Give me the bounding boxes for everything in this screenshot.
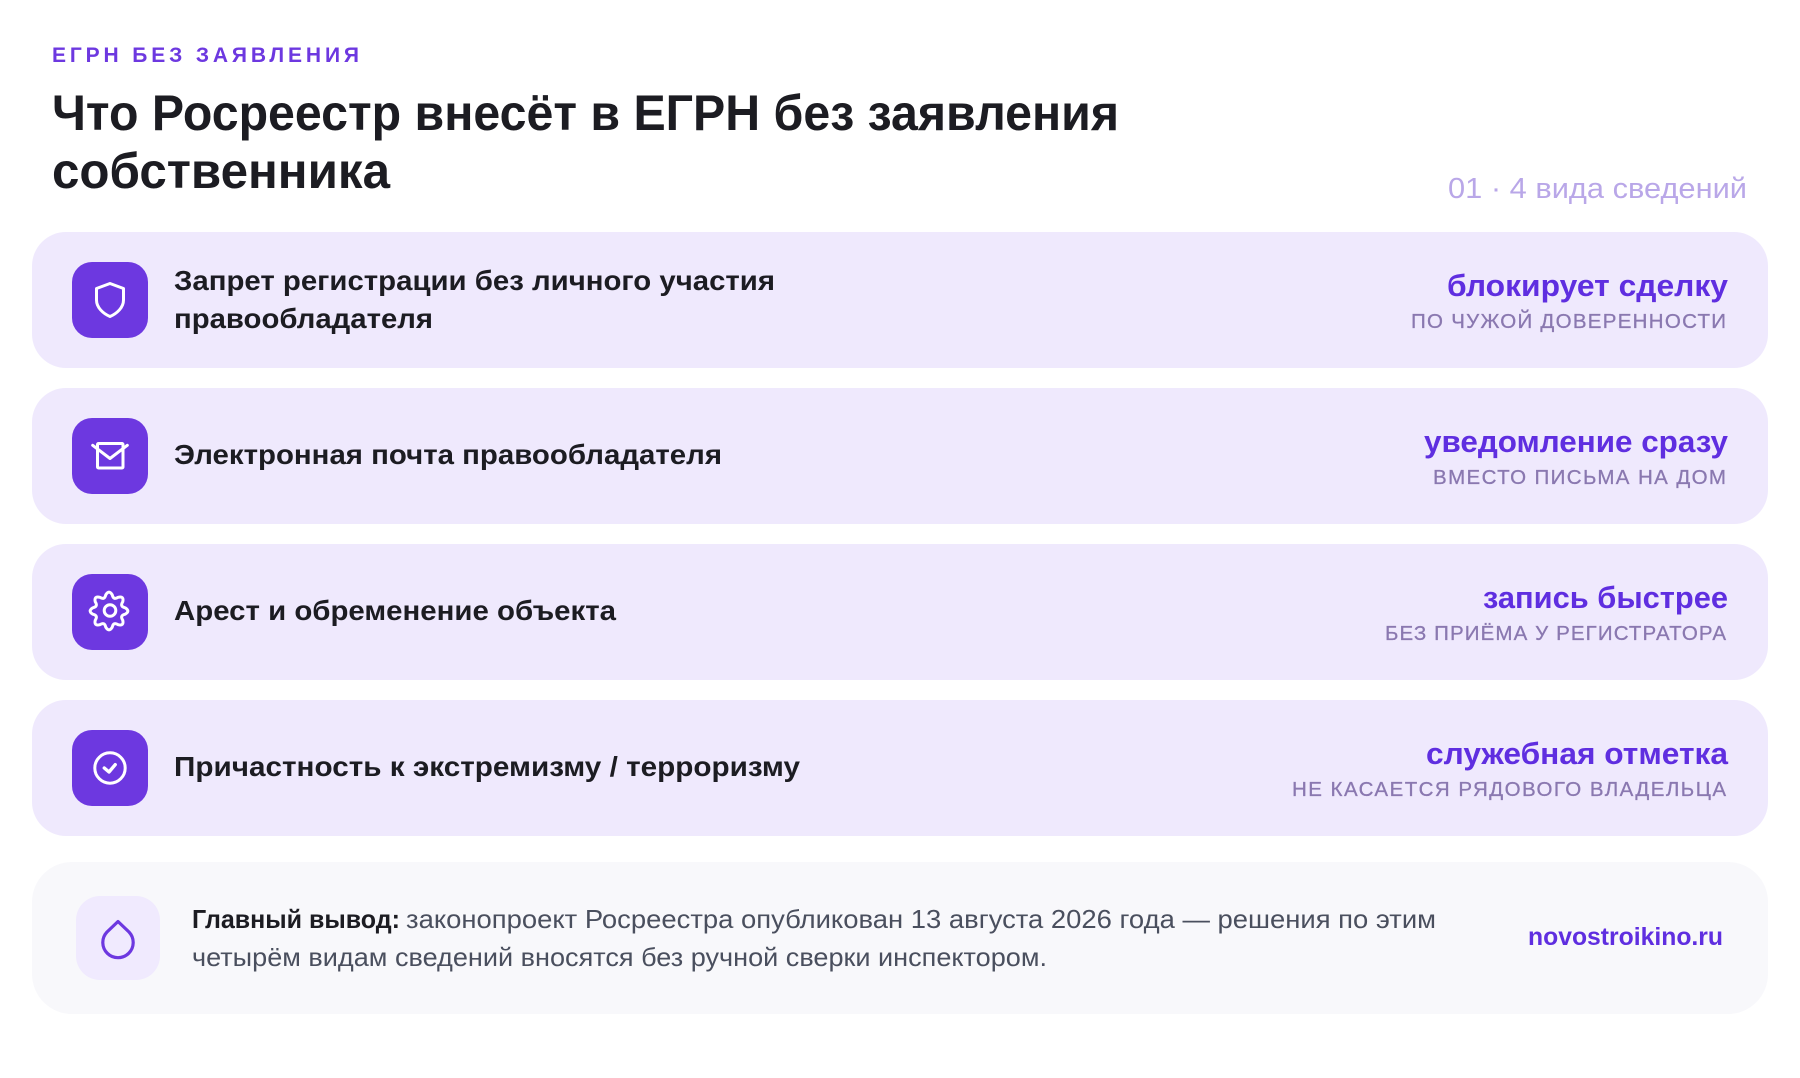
panel: row 4 <box>32 700 1768 836</box>
panel: row 1 <box>32 232 1768 368</box>
row 1 note: ПО ЧУЖОЙ ДОВЕРЕННОСТИ <box>1411 309 1726 333</box>
icon: check circle <box>72 730 148 806</box>
section tag: 01 · 4 вида сведений <box>1448 173 1747 205</box>
panel: row 2 <box>32 388 1768 524</box>
row 1 label <box>174 265 775 334</box>
row 1 label: правообладателя <box>174 303 433 334</box>
icon: drop <box>76 896 160 980</box>
conclusion text <box>192 904 1436 972</box>
row 3 note: БЕЗ ПРИЁМА У РЕГИСТРАТОРА <box>1385 622 1726 645</box>
icon: mail <box>72 418 148 494</box>
conclusion text: Главный вывод: <box>192 904 400 934</box>
panel: row 3 <box>32 544 1768 680</box>
row 4 note: НЕ КАСАЕТСЯ РЯДОВОГО ВЛАДЕЛЬЦА <box>1292 778 1726 801</box>
row 2 result: уведомление сразу <box>1424 424 1729 459</box>
row 3 label: Арест и обременение объекта <box>174 595 616 626</box>
eyebrow label: ЕГРН БЕЗ ЗАЯВЛЕНИЯ <box>52 44 359 67</box>
conclusion text: законопроект Росреестра опубликован 13 августа 2026 года — решения по этим <box>406 904 1436 934</box>
row 1 result: блокирует сделку <box>1447 268 1729 303</box>
source link: novostroikino.ru <box>1528 923 1723 951</box>
row 4 result: служебная отметка <box>1426 736 1729 771</box>
row 2 label: Электронная почта правообладателя <box>174 439 722 470</box>
title: собственника <box>52 143 391 199</box>
row 3 result: запись быстрее <box>1483 580 1728 615</box>
icon: gear <box>72 574 148 650</box>
icon: shield <box>72 262 148 338</box>
title: Что Росреестр внесёт в ЕГРН без заявления <box>52 85 1119 141</box>
row 1 label: Запрет регистрации без личного участия <box>174 265 775 296</box>
title <box>52 85 1119 199</box>
row 2 note: ВМЕСТО ПИСЬМА НА ДОМ <box>1433 466 1726 489</box>
panel: conclusion <box>32 862 1768 1014</box>
row 4 label: Причастность к экстремизму / терроризму <box>174 751 800 782</box>
conclusion text: четырём видам сведений вносятся без ручной сверки инспектором. <box>192 942 1047 972</box>
